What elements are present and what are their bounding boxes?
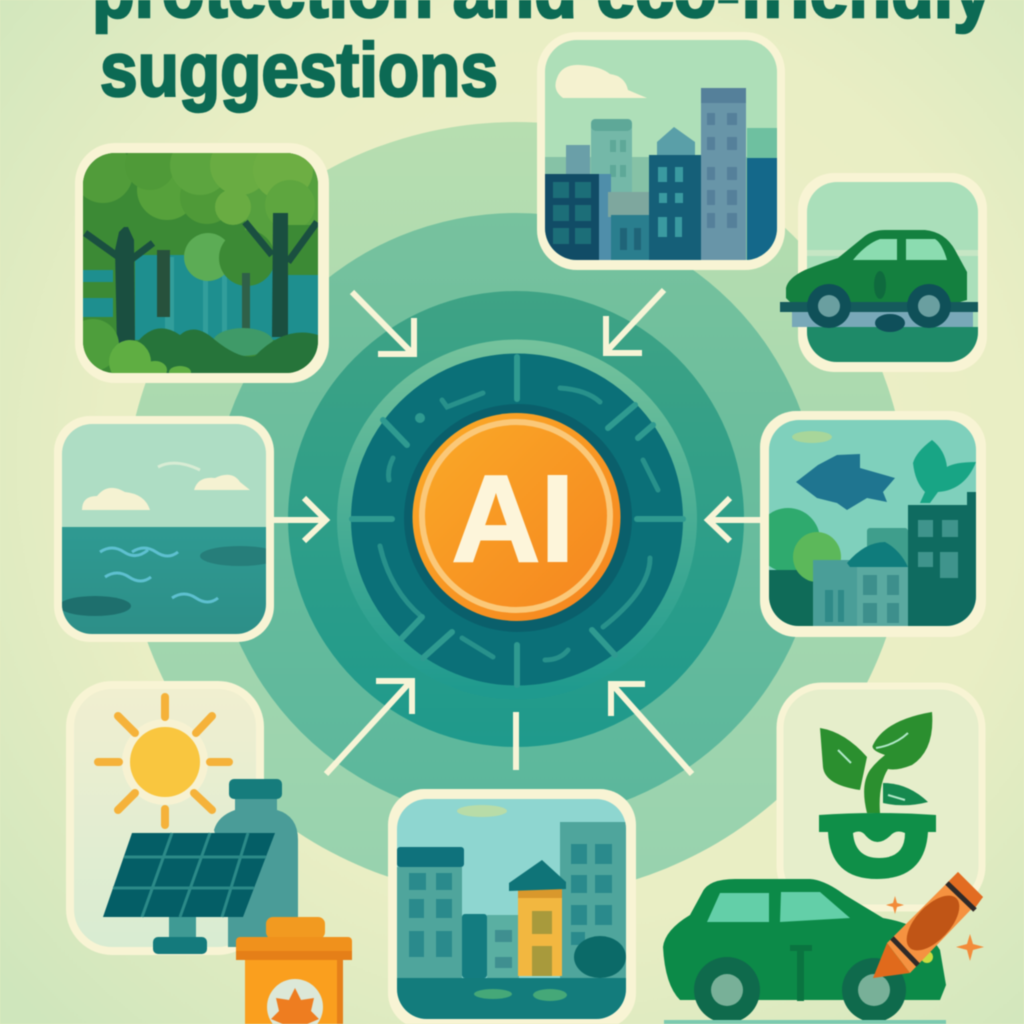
panel: fish and green city bbox=[756, 411, 986, 637]
icon: recycling bin bbox=[236, 917, 352, 1024]
ring ticks bbox=[352, 357, 683, 685]
waves bbox=[100, 548, 218, 602]
arrows bbox=[274, 290, 762, 774]
car bbox=[786, 230, 967, 302]
clouds bbox=[82, 488, 150, 510]
title bbox=[92, 0, 992, 113]
arrow: right bbox=[708, 498, 762, 541]
trunks bbox=[115, 213, 288, 347]
icon: crayon bbox=[873, 872, 983, 978]
AI hub bbox=[344, 346, 690, 692]
panel: forest bbox=[67, 135, 329, 384]
icon: solar panel bbox=[103, 833, 275, 954]
arrow: top left bbox=[352, 292, 414, 355]
fish bbox=[796, 454, 895, 510]
arrow: top right bbox=[606, 290, 664, 353]
arrow: bottom right bbox=[611, 683, 692, 774]
icon: sprout bbox=[819, 712, 936, 879]
panel: solar, sun and bottle bbox=[70, 685, 298, 954]
arrow: bottom left bbox=[326, 680, 412, 774]
icon: sun bbox=[98, 697, 229, 825]
orange disc bbox=[412, 413, 620, 621]
icon: bottle bbox=[214, 779, 298, 947]
panel: bottom city bbox=[388, 789, 636, 1024]
icon: sparkles bbox=[886, 896, 984, 961]
arrow: left bbox=[274, 498, 326, 541]
road bbox=[792, 312, 973, 327]
panel: sprout bbox=[780, 686, 982, 908]
arrow: bottom stem bbox=[513, 712, 519, 770]
cloud bbox=[555, 65, 647, 98]
bushes bbox=[213, 328, 273, 356]
panel: city skyline bbox=[537, 32, 785, 270]
outer ring bbox=[344, 346, 690, 692]
concentric background circles bbox=[124, 122, 908, 898]
icon: green car bbox=[663, 879, 946, 1024]
leaves bbox=[913, 440, 976, 503]
panel: car on road bbox=[780, 173, 987, 372]
panel: ocean bbox=[54, 416, 280, 642]
canopy bbox=[83, 153, 132, 203]
AI label: AI bbox=[452, 451, 574, 588]
title: suggestions bbox=[100, 28, 498, 113]
inner dark ring bbox=[404, 404, 632, 632]
